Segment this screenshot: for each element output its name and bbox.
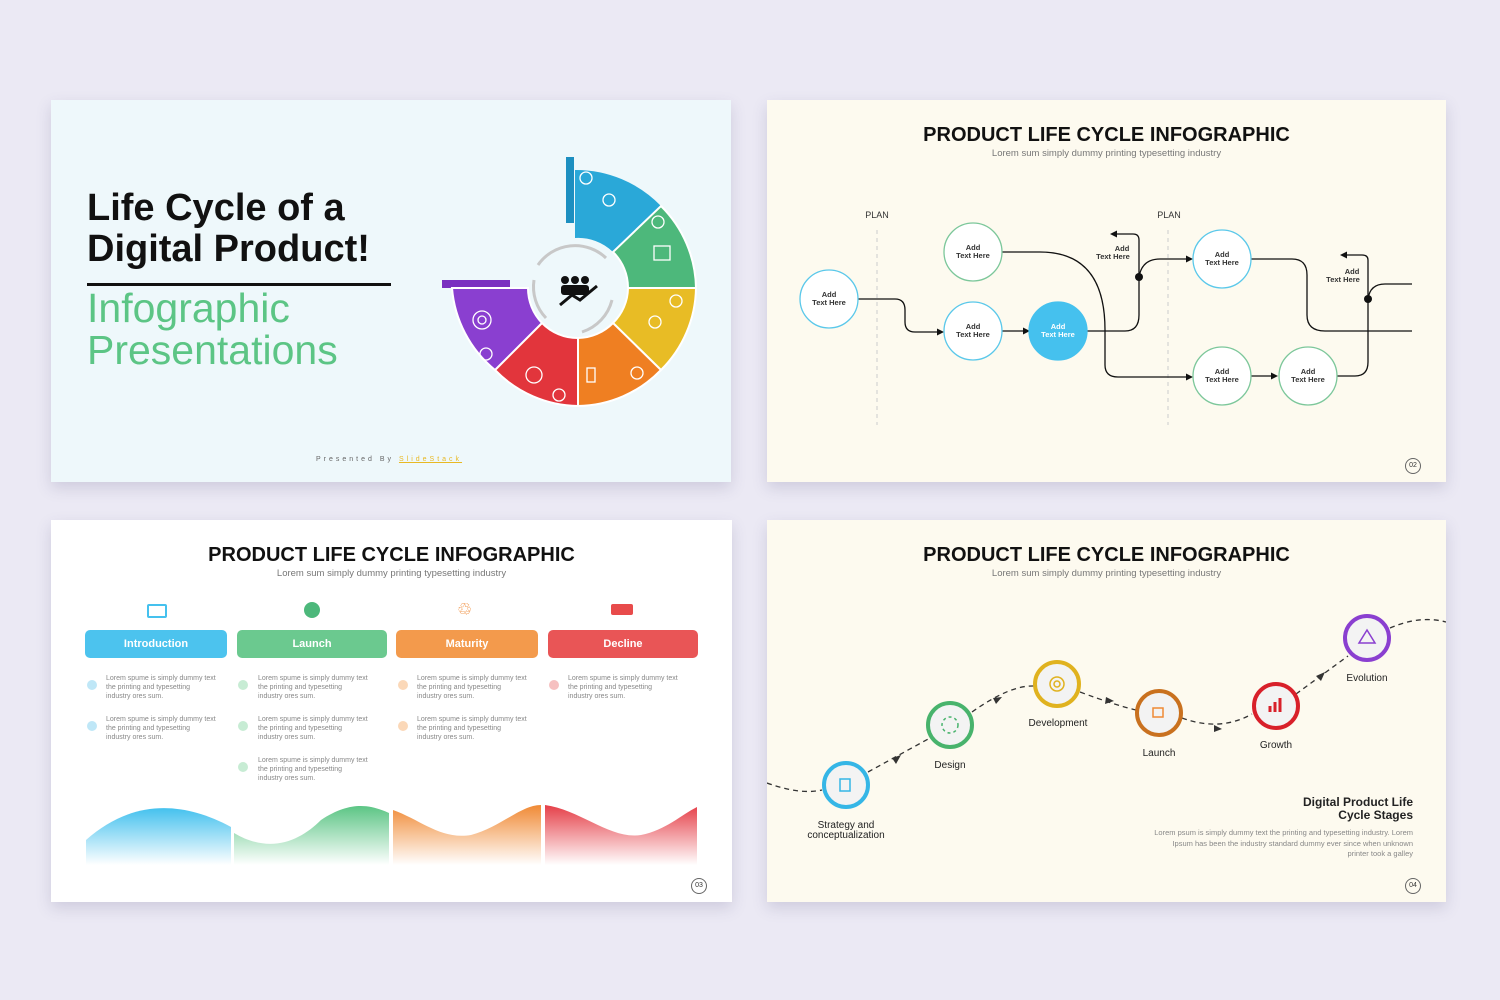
presented by: Presented By SlideStack bbox=[316, 456, 462, 463]
ring chart bbox=[442, 157, 697, 407]
slide 1: title slide bbox=[51, 100, 731, 482]
title: Life Cycle of a bbox=[87, 187, 345, 229]
flow chart: Text Here bbox=[1096, 252, 1130, 261]
description text: Lorem psum is simply dummy text the printing and typesetting industry. Lorem Ipsum has been the industry standard dummy ever since when unknown printer took a galley bbox=[1154, 828, 1413, 858]
flow chart: Add bbox=[822, 290, 837, 299]
bullet lists: Lorem spume is simply dummy text the printing and typesetting industry ores sum. bbox=[417, 675, 527, 700]
heading: PRODUCT LIFE CYCLE INFOGRAPHIC bbox=[923, 124, 1290, 146]
flow chart: PLAN bbox=[865, 210, 889, 220]
subtitle: Presentations bbox=[87, 327, 338, 373]
flow chart: Add bbox=[1215, 250, 1230, 259]
title: Digital Product! bbox=[87, 228, 370, 270]
flow chart: Add bbox=[1115, 244, 1130, 253]
description heading: Digital Product Life bbox=[1303, 795, 1413, 809]
slide 2: flow diagram bbox=[767, 100, 1446, 482]
flow chart: Add bbox=[1051, 322, 1066, 331]
stage bars bbox=[85, 630, 698, 658]
flow chart: Add bbox=[1345, 267, 1360, 276]
slide 3: stages with waves bbox=[51, 520, 732, 902]
bullet lists: Lorem spume is simply dummy text the printing and typesetting industry ores sum. bbox=[106, 675, 216, 700]
title bbox=[87, 187, 370, 270]
bullet lists: Lorem spume is simply dummy text the printing and typesetting industry ores sum. bbox=[258, 716, 368, 741]
stage path chart: Growth bbox=[1260, 740, 1292, 751]
flow chart: Text Here bbox=[1326, 275, 1360, 284]
description heading bbox=[1303, 795, 1413, 822]
flow chart: PLAN bbox=[1157, 210, 1181, 220]
flow chart: Text Here bbox=[1205, 258, 1239, 267]
bullet lists: Lorem spume is simply dummy text the printing and typesetting industry ores sum. bbox=[258, 675, 368, 700]
flow chart: Text Here bbox=[956, 251, 990, 260]
flow chart: Add bbox=[1301, 367, 1316, 376]
stage bars: Introduction bbox=[124, 638, 188, 650]
flow chart: Add bbox=[1215, 367, 1230, 376]
bullet lists: Lorem spume is simply dummy text the printing and typesetting industry ores sum. bbox=[106, 716, 216, 741]
flow chart bbox=[799, 210, 1412, 425]
icons row: ♲ bbox=[457, 600, 472, 619]
page number bbox=[1405, 458, 1421, 474]
stage path chart: Design bbox=[934, 760, 966, 771]
flow chart: Text Here bbox=[956, 330, 990, 339]
page number: 03 bbox=[695, 882, 703, 889]
subheading: Lorem sum simply dummy printing typesetting industry bbox=[992, 568, 1221, 579]
bullet lists: Lorem spume is simply dummy text the printing and typesetting industry ores sum. bbox=[417, 716, 527, 741]
icons row bbox=[147, 600, 633, 619]
stage path chart: Development bbox=[1029, 718, 1088, 729]
subtitle: Infographic bbox=[87, 285, 290, 331]
flow chart: Add bbox=[966, 322, 981, 331]
stage bars: Launch bbox=[292, 638, 332, 650]
heading: PRODUCT LIFE CYCLE INFOGRAPHIC bbox=[923, 544, 1290, 566]
page number: 04 bbox=[1409, 882, 1417, 889]
subheading: Lorem sum simply dummy printing typesetting industry bbox=[277, 568, 506, 579]
stage path chart: Evolution bbox=[1346, 673, 1388, 684]
stage path chart bbox=[767, 614, 1446, 841]
heading: PRODUCT LIFE CYCLE INFOGRAPHIC bbox=[208, 544, 575, 566]
stage bars: Maturity bbox=[446, 638, 488, 650]
flow chart: Text Here bbox=[1291, 375, 1325, 384]
page number: 02 bbox=[1409, 462, 1417, 469]
flow chart: Add bbox=[966, 243, 981, 252]
title underline bbox=[87, 283, 391, 286]
subtitle bbox=[87, 285, 338, 373]
description heading: Cycle Stages bbox=[1338, 808, 1413, 822]
subheading: Lorem sum simply dummy printing typesetting industry bbox=[992, 148, 1221, 159]
flow chart: Text Here bbox=[1041, 330, 1075, 339]
flow chart: Text Here bbox=[1205, 375, 1239, 384]
page number bbox=[691, 878, 707, 894]
stage path chart: Strategy and bbox=[818, 820, 874, 831]
slide 4: stage path bbox=[767, 520, 1446, 902]
flow chart: Text Here bbox=[812, 298, 846, 307]
bullet lists bbox=[87, 674, 678, 782]
stage bars: Decline bbox=[603, 638, 643, 650]
stage path chart: Launch bbox=[1143, 748, 1175, 759]
bullet lists: Lorem spume is simply dummy text the printing and typesetting industry ores sum. bbox=[258, 757, 368, 782]
page number bbox=[1405, 878, 1421, 894]
bullet lists: Lorem spume is simply dummy text the printing and typesetting industry ores sum. bbox=[568, 675, 678, 700]
stage path chart: conceptualization bbox=[807, 830, 885, 841]
wave chart bbox=[86, 805, 697, 862]
